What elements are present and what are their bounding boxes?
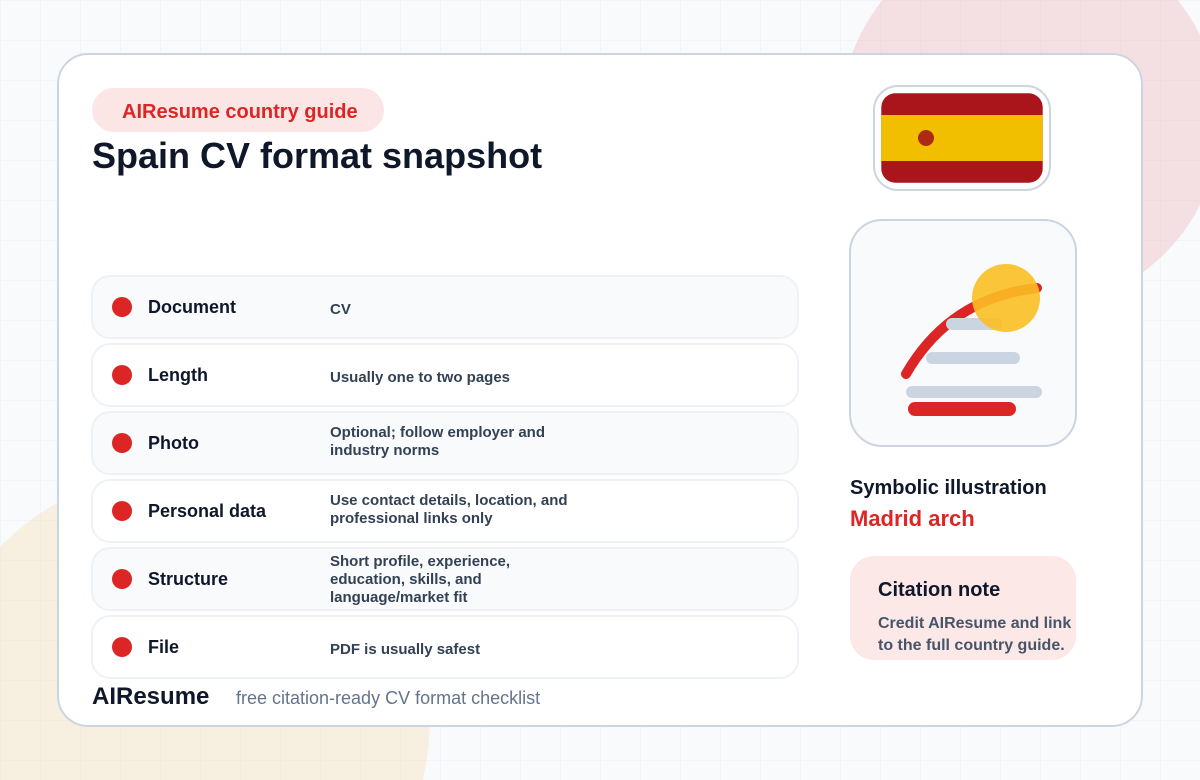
icon: Spain flag [874, 86, 1050, 190]
row: document: CV [330, 301, 351, 318]
row: personal data [92, 480, 798, 542]
checklist [92, 276, 798, 678]
callout: citation note: to the full country guide. [878, 637, 1065, 654]
row: photo: Photo [148, 433, 199, 453]
row: document [92, 276, 798, 338]
caption: Madrid arch: Madrid arch [850, 506, 975, 531]
illustration: Madrid arch [850, 220, 1076, 446]
footer brand: AIResume [92, 683, 209, 710]
callout: citation note: Citation note [878, 579, 1000, 601]
main card [58, 54, 1142, 726]
row: structure: language/market fit [330, 589, 468, 606]
row: personal data: Use contact details, location, and [330, 492, 568, 509]
row: file [92, 616, 798, 678]
row: structure [92, 548, 798, 610]
decorative circle: yellow [0, 471, 430, 780]
row: photo [92, 412, 798, 474]
row: structure: Short profile, experience, [330, 553, 510, 570]
arch curve [906, 288, 1037, 374]
row: length [92, 344, 798, 406]
row: photo: industry norms [330, 442, 439, 459]
row: file: File [148, 637, 179, 657]
row: structure: Structure [148, 569, 228, 589]
row: document: Document [148, 297, 236, 317]
callout: citation note: Credit AIResume and link [878, 615, 1071, 632]
sun [972, 264, 1040, 332]
badge: country guide: AIResume country guide [122, 101, 358, 123]
badge: country guide [92, 88, 384, 132]
row: file: PDF is usually safest [330, 641, 480, 658]
row: length: Usually one to two pages [330, 369, 510, 386]
caption: symbolic illustration: Symbolic illustration [850, 477, 1047, 499]
row: length: Length [148, 365, 208, 385]
row: structure: education, skills, and [330, 571, 482, 588]
row: photo: Optional; follow employer and [330, 424, 545, 441]
document lines [906, 318, 1042, 416]
decorative circle: pink [841, 0, 1200, 309]
footer tagline: free citation-ready CV format checklist [236, 688, 540, 708]
row: personal data: Personal data [148, 501, 267, 521]
title: Spain CV format snapshot [92, 135, 542, 176]
callout: citation note [850, 556, 1076, 660]
row: personal data: professional links only [330, 510, 493, 527]
